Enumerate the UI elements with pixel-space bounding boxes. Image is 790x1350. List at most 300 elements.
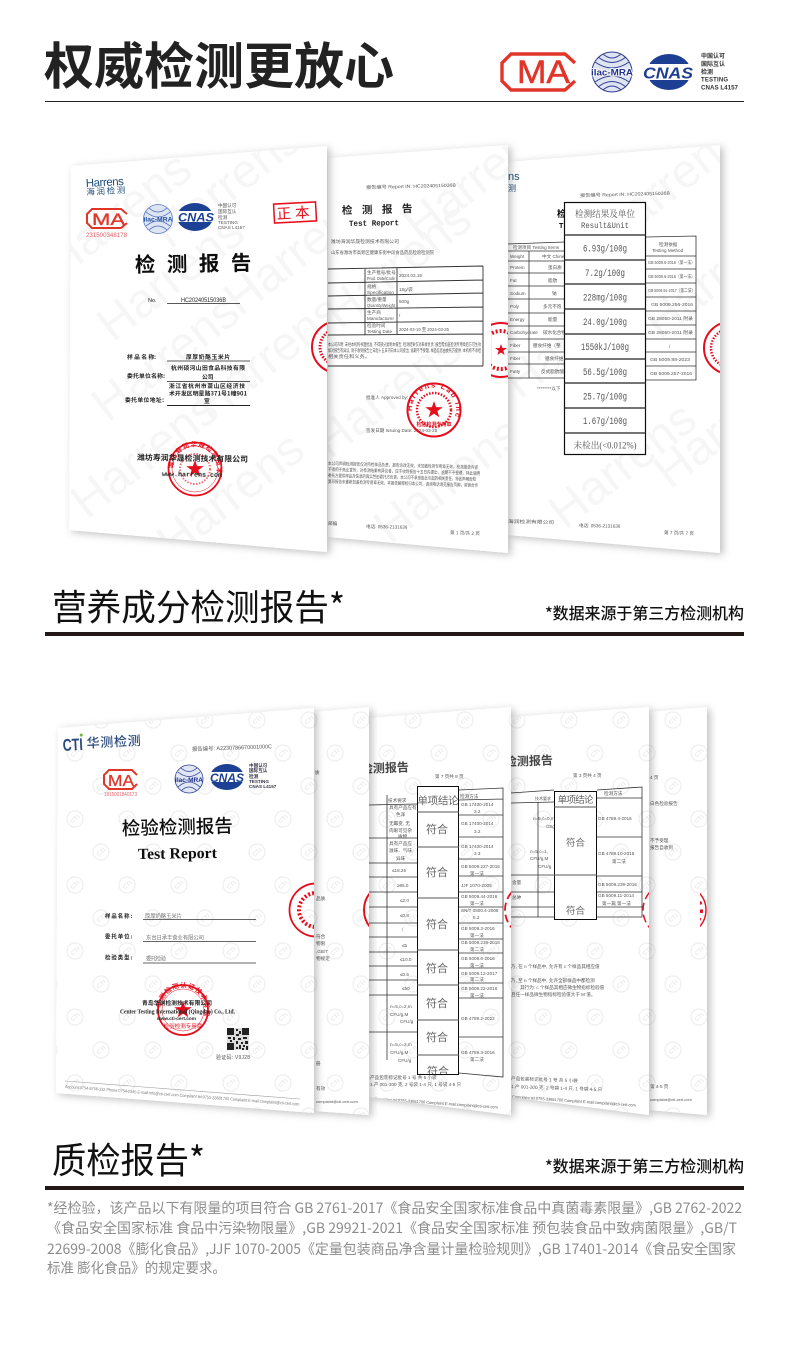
icon: CMA [86,209,128,239]
panel: inspection page 2 [314,706,376,1120]
info table: 2024.03.19 [399,273,422,278]
disclaimer paragraph: *经检验，该产品以下有限量的项目符合 GB 2761-2017《食品安全国家标准食品中真菌毒素限量》,GB 2762-2022 [47,1198,742,1218]
red stamp: 潍坊寿润华晟检测技术有限公司 [168,441,222,474]
panel: inspection page 5: 第 4-5 页 [650,1083,669,1090]
issuer: www.harrens.com [162,471,222,480]
panel: inspection page 3: 检测报告 [361,758,409,777]
panel: report page 2: Harrens [304,322,471,469]
panel: inspection page 4: 第一篇 第一法 [602,900,631,907]
panel: report page 3: GB 28050-2011 附录 [648,315,693,322]
panel: inspection page 3: GB 17400-2014 [461,821,494,826]
panel: inspection page 3: 第一法 [470,962,484,969]
conclusion highlight table: 符合 [426,916,448,932]
panel: report page 3: Poly [510,304,520,309]
panel: inspection page 3: GB 5009.12-2017 [461,971,498,976]
disclaimer paragraph: 22699-2008《膨化食品》,JJF 1070-2005《定量包装商品净含量计量检验规则》,GB 17401-2014《食品安全国家 [47,1239,736,1259]
panel: inspection page 4: 乃, 在 n 个样品中, 允许有 c 个样品其相应值 [511,963,600,970]
panel: inspection page 3: 第一法 [470,992,484,999]
panel: report page 3: ns [508,171,520,183]
results highlight table: 228mg/100g [583,292,627,304]
panel: inspection page 3: 具有产品应有 [389,804,417,811]
panel: report page 2: 潍坊海润华晟检测技术有限公司 [331,238,399,245]
icon: CMA: MA [92,210,126,229]
panel: inspection page 3: 肉眼可见杂 [389,827,412,834]
info table: 生产批号/批号 [367,269,396,276]
panel: inspection page 3: ≤50 [402,986,410,991]
info table: Manufacturer [367,316,394,321]
sample fields: 东台日承丰食业有限公司 [146,934,204,942]
partial stamp [311,322,327,372]
panel: report page 3: Sodium [510,291,526,296]
icon: ilac-MRA mark: ilac-MRA [591,68,633,78]
panel: inspection page 3: 1.产 001-300 克, 2 号袋 1-4 只, 1 号袋 4-5 只 [370,1081,462,1088]
report number: HC20240515036B [181,298,226,304]
panel: inspection page 4: n=5,c=1, [530,849,548,854]
accreditation text: TESTING [701,78,728,84]
panel: inspection page 3: CFU/g [398,1058,412,1063]
panel: inspection page 3: ≥95.0 [397,883,409,888]
sample fields: 委托单位: [105,932,133,940]
conclusion highlight table: 符合 [566,835,585,849]
panel: report page 1 cover: Harrens [214,179,381,326]
red stamp [406,382,462,438]
panel: inspection page 5: 4 页 [650,775,659,781]
panel: inspection page 3: GB 5009.227-2016 [461,864,500,869]
panel: inspection page 2: ,GB/T [316,949,328,954]
panel: report page 3: ********以下 [537,386,561,392]
conclusion highlight table [554,792,597,920]
panel: inspection page 4: 总砷 [512,894,522,901]
info table: 规格 [367,283,377,290]
panel: report page 3: 钠 [552,290,557,297]
cover heading: 检测报告 [135,246,263,278]
results highlight table: 检测结果及单位 [575,208,635,219]
panel: report page 1 cover: Harrens [184,285,351,432]
issuer [120,1000,235,1020]
panel: inspection page 3: 产品包装标记批号 1 号 共 5 小袋 [370,1074,437,1081]
panel: inspection page 3: / [402,927,404,932]
panel: report page 3: 报告编号 Report IN: HC20240515036B [580,190,670,199]
panel: inspection page 3: GB 5009.6-2016 [461,956,495,961]
results highlight table: 1550kJ/100g [581,342,629,354]
report heading: 检测报告 [342,201,422,218]
panel: report page 1 cover: Harrens [87,205,254,352]
panel: inspection page 1 cover: TESTING [249,779,269,784]
panel: inspection page 4: CFU/g [538,864,552,869]
icon: CNAS: CNAS [210,773,244,785]
panel: inspection page 3: 滋味、气味, [389,847,413,854]
panel: report page 3: 测 [508,183,516,194]
panel: report page 1 cover: 中国认可 [218,202,237,209]
heading: quality report: 质检报告* [52,1132,205,1184]
terms paragraph [328,460,480,489]
partial stamp [491,321,508,379]
panel: inspection page 4: 乃, 至 n 个样品中, 允许全部样品中都检测 [511,977,595,984]
panel: report page 3: GB 5009.257-2016 [650,371,692,376]
panel: inspection page 3: 3.2 [474,829,481,834]
sample fields: 术开发区明星路371号1幢901 [169,388,248,398]
conclusion highlight table: 符合 [426,995,448,1011]
info table: Quantity/Weight [367,303,396,308]
panel: report page 3: GB 5009.88-2023 [650,357,690,362]
accreditation text [701,51,739,92]
sample fields: 室 [204,396,210,405]
panel: report page 3: 多元不饱 [543,303,562,310]
icon: CNAS: CNAS [178,210,214,224]
panel: inspection page 3: GB 5009.44-2016 [461,894,498,899]
panel: inspection page 2: 物限 [316,940,326,947]
info table: 如对报告有异议, 请于收到报告之日起十五日内向本公司提出, 逾期不予受理, 样品信息由委托方提供, 本机构不承担 [328,347,481,354]
panel: report page 3: 能量 [548,316,558,323]
report heading [342,203,412,228]
panel: inspection page 1 cover [54,706,322,1118]
panel: inspection page 3: 5.2 [473,915,480,920]
panel: inspection page 4: Complaint tel:0755-33681700 Complaint E-mail:complaint@cti-cert.com [512,1094,637,1108]
sample fields: 委托检验 [146,954,167,962]
panel: report page 1 cover: Harrens [147,422,314,569]
results table background [508,236,696,380]
sample fields: 检验类型: [105,954,133,962]
conclusion highlight table: 符合 [426,960,448,976]
table [511,787,642,917]
icon: ilac-MRA mark [591,52,633,92]
icon: CNAS [177,203,215,231]
conclusion highlight table: 单项结论 [558,792,594,806]
panel: inspection page 4: 含量 [512,879,522,886]
panel: inspection page 3: ≤2.0 [400,898,409,903]
panel: inspection page 3: 3.2 [474,809,481,814]
panel: inspection page 5: complaint@cti-cert.com [650,1097,693,1102]
red stamp: 检验检测专用章 [164,1022,203,1030]
panel: report page 2: Harrens [314,192,481,339]
panel: report page 3: 膳食纤维（整 [533,342,561,349]
panel: report page 3: GB 5009.256-2016 [651,302,693,307]
panel: inspection page 3: 第二法 [470,946,484,953]
panel: report page 2: 报告编号 Report IN: HC20240515036B [366,182,456,191]
accreditation text: 检测 [701,67,713,76]
panel: inspection page 3: 3.3 [474,851,481,856]
sample fields: 厚厚奶酪玉米片 [186,352,230,361]
report heading: Test Report [349,219,399,229]
panel: inspection page 2: 符合 [316,933,326,940]
info table [328,266,483,366]
QR code [227,1028,249,1050]
panel: inspection page 3: 第一法 [470,932,484,939]
panel: inspection page 3: GB 17400-2014 [461,844,494,849]
results highlight table: Result&Unit [581,222,629,231]
accreditation text: 中国认可 [701,51,725,60]
cover heading [122,816,232,862]
results highlight table: 56.5g/100g [583,367,627,379]
info table: Testing Date [367,329,392,334]
heading: nutrition report: 营养成分检测报告* [52,579,345,631]
panel: report page 3: 膳食纤维 [545,355,564,362]
sample fields: 杭州硕河山田食品科技有限 [171,363,245,372]
panel: report page 3: Protein [510,265,525,270]
info table: 18g/袋 [399,286,413,293]
panel: report page 3: 碳水化合物 [543,329,566,336]
cover heading: Test Report [138,845,218,863]
panel: inspection page 4 [511,706,656,1120]
info table: 相关责任和义务。 [328,353,370,360]
panel: report page 3: 脂肪 [548,277,558,284]
panel: inspection page 3: GB 4789.2-2022 [461,1016,495,1021]
info table: 检验时间 [367,322,386,329]
disclaimer paragraph: 标准 膨化食品》的规定要求。 [47,1258,226,1278]
panel: report page 2: 电话: 0536-2131636 [366,523,408,531]
panel: inspection page 2: 物规定 [316,955,330,962]
panel: report page 1 cover: Harrens [82,285,249,432]
panel: inspection page 4: 第二法 [612,858,626,865]
panel: report page 3: 检 [557,207,566,220]
panel: inspection page 3: ≤18.25 [392,868,406,873]
icon: ilac [144,204,173,234]
certification logos [502,51,739,92]
heading: nutrition report [52,579,744,631]
info table: / [399,313,401,318]
conclusion highlight table: 符合 [566,903,585,917]
Harrens logo: 海润检测 [86,184,126,198]
panel: inspection page 5: 白色检验报告 [650,800,678,807]
icon: CMA: 1815001840173 [104,792,137,798]
panel: report page 3: 反式脂肪酸 [541,368,564,375]
panel: inspection page 3: 技术要求 [388,797,407,804]
panel: inspection page 4: GB 5009.239-2016 [598,882,637,887]
panel: inspection page 5: 不予受理, [650,837,670,844]
panel: inspection page 3: 色泽 [396,811,406,818]
panel: inspection page 4: CFU/g,M [530,856,549,861]
panel: inspection page 5: 报告自收到 [650,844,673,851]
info table: 本公司声明: 未经本机构书面批准, 不得部分复制本报告, 检测结果仅对来样负责, 报告需加盖检测专用章后方可生效 [328,341,481,348]
info table: 数量/重量 [367,296,387,303]
panel: report page 3: 海润检测有限公司 [508,518,555,526]
panel: report page 3: 蛋白质 [548,264,562,271]
title: 权威检测更放心 [44,27,394,99]
sample fields: 样品名称: [105,912,133,920]
panel: inspection page 2: 质 [315,769,320,776]
panel: inspection page 3: 第二法 [470,976,484,983]
panel: report page 3: Fat [510,278,517,283]
panel: inspection page 3: 第一法 [470,900,484,907]
panel: report page 3: 检测依据 [659,241,678,248]
panel: inspection page 3: 质物 [398,833,408,840]
info table: 500g [399,299,410,304]
panel: report page 2: Harrens [364,407,531,554]
panel: report page 3: GB 5009.5-2016（第一法） [648,259,695,266]
panel: report page 3: GB 28050-2011 附录 [648,329,693,336]
panel: inspection page 1 cover: 中国认可 [249,762,268,769]
panel: report page 1 cover [68,144,334,558]
panel: inspection page 3: ≤5 [402,943,408,948]
panel: inspection page 4: GB 4789.10-2016 [598,851,635,856]
panel: report page 2: 山东省潍坊市高新区健康东街中段食品药品检验检测院 [331,249,434,256]
Harrens logo [86,178,125,196]
panel: report page 1 cover: 检测 [218,214,228,221]
panel: inspection page 3: JJF 1070-2005 [461,883,492,888]
issuer: 青岛华测检测技术有限公司 [142,998,212,1007]
panel: inspection page 3: 第一法 [470,870,484,877]
Harrens logo: Harrens [86,176,124,190]
panel: inspection page 3: 第 7 页共 8 页 [435,773,464,780]
panel: report page 1 cover: 国际互认 [218,208,237,215]
panel: report page 3: Weight [510,254,525,259]
accreditation text: CNAS L4157 [701,86,739,92]
panel: inspection page 3: Complaint tel:0755-33681700 Complaint E-mail:complaint@cti-cert.com [374,1096,499,1110]
red stamp [156,982,210,1036]
panel: report page 1 cover: Harrens [61,382,228,529]
panel: inspection page 3: GB 5009.239-2016 [461,940,500,945]
panel: report page 3: Testing Method [652,248,684,253]
panel: inspection page 3: ≤10.0 [400,957,412,962]
conclusion highlight table: 单项结论 [418,793,459,808]
results highlight table [564,202,646,454]
panel: inspection page 3: n=5,c=2,m [390,1004,412,1009]
panel: report page 2: 签发日期 Issuing Date: 2024-03-25 [366,427,438,434]
panel: inspection page 4: GB 4789.4-2016 [598,816,632,821]
panel: inspection page 1 cover: 报告编号: A2230786670001000C [192,742,272,753]
panel: inspection page 3: 具有产品应 [389,840,412,847]
panel: inspection page 2: 有效 [316,1085,326,1092]
panel: report page 3: Carbohydrate [510,330,538,335]
panel: report page 1 cover: CNAS L4157 [218,225,245,230]
panel: report page 3: Harrens [584,112,751,259]
report number: No. [148,298,157,304]
results highlight table: 未检出(<0.012%) [574,440,636,450]
panel: inspection page 4: 产品包装标记批号 1 号 共 5 小袋 [511,1075,578,1084]
panel: inspection page 4: 1.产 001-300 克, 2 号袋 1-4 只, 1 号袋 4-5 只 [511,1083,603,1093]
sample fields: 公司 [202,372,214,381]
conclusion highlight table [417,786,459,1079]
panel: report page 1 cover: Harrens [144,112,311,259]
panel: inspection page 1 cover: 验证码: V9J28 [216,1054,250,1061]
panel: inspection page 2: complaint@cti-cert.com [316,1099,359,1104]
sample fields [125,352,250,406]
info table: 生产商 [367,309,381,316]
red stamp: 检验检测专用章 [416,421,452,428]
panel: inspection page 3: GB 5009.3-2016 [461,926,495,931]
panel: report page 2 [327,144,516,558]
sample fields: 委托单位地址: [125,395,164,404]
panel: inspection page 3: ≤0.8 [400,913,409,918]
icon: CMA: 231500348178 [86,233,128,239]
results highlight table: 6.93g/100g [583,244,627,256]
panel: inspection page 1 cover: 国际互认 [249,767,268,774]
icon: CNAS mark [642,54,696,90]
report number [148,298,240,304]
panel: inspection page 3: CFU/g,M [390,1012,409,1017]
panel: report page 2: 第 1 页/共 2 页 [450,529,480,537]
sample fields: 样 品 名 称: [127,352,156,361]
panel: inspection page 4: 其行为: c 个样品其相应微生物指标检验值 [520,984,605,991]
CTI logo: CTI [62,735,83,755]
panel: inspection page 3: CFU/g [400,1019,414,1024]
panel: inspection page 1 cover: CNAS L4157 [249,784,277,789]
footer: Account:0754-8756-132 Phone:0754-2345 E-mail:info@cti-cert.com Complaint tel:0755-33681700 Complaint E-mail:complaint@cti-cert.com [65,1084,300,1107]
panel: inspection page 2: 册 [316,1061,321,1067]
results highlight table: 24.0g/100g [583,317,627,329]
partial stamp [290,884,342,936]
panel: inspection page 4: 技术要求 [535,795,551,801]
heading: quality report [52,1132,744,1184]
panel: inspection page 3: 无霉变, 无 [389,820,410,827]
panel: inspection page 3: GB 5009.22-2016 [461,986,498,991]
red stamp [168,441,222,496]
icon: CNAS mark: CNAS [643,66,693,82]
icon: CMA mark [502,54,575,90]
panel: report page 3: / [669,344,671,349]
panel: report page 3: Fiber [510,343,521,348]
icon: CNAS [209,764,245,790]
panel: inspection page 4: 检测报告 [505,751,553,770]
panel: inspection page 2: 品质 [316,895,326,902]
icon: CMA mark: MA [517,54,571,90]
icon: ilac: ilac-MRA [175,777,203,784]
panel: inspection page 3 [369,706,518,1120]
panel: report page 1 cover: Harrens [34,142,201,289]
terms paragraph: 本公司声明检测报告仅对所检样品负责，报告涂改无效，未加盖检测专用章无效，检测报告内容 [328,460,478,471]
panel: report page 3: GB 5009.91-2017（第二法） [648,287,695,294]
issuer: 潍坊寿润华晟检测技术有限公司 [137,452,248,465]
info table: 2024-03-19 至 2024-03-25 [399,327,449,332]
disclaimer paragraph [47,1198,742,1278]
cover heading: 检验检测报告 [121,812,233,841]
terms paragraph: 委托方提供样品及信息的真实性由委托方负责，本公司不承担由此引起的相关责任，特此声明告知 [328,472,476,483]
panel: report page 3: Harrens [539,392,706,539]
conclusion highlight table: 符合 [426,864,448,880]
accreditation text: 国际互认 [701,59,725,68]
panel: inspection page 4: 第 3 页共 4 页 [573,772,602,779]
panel: report page 3: Fatty [510,369,521,374]
sample fields: 委托单位名称: [127,371,165,380]
panel: inspection page 4: 且任一样品微生物指标检验值大于 M 值。 [511,991,595,998]
panel: report page 3: 中文 Chines [542,253,567,260]
panel: report page 3: Harrens [494,262,661,409]
info table: Specification [367,290,394,295]
panel: report page 3: Energy [510,317,525,322]
conclusion highlight table: 符合 [427,1063,449,1079]
results highlight table: 25.7g/100g [583,392,627,404]
panel: report page 2: 批准人 Approved by: [366,394,408,401]
disclaimer paragraph: 《食品安全国家标准 食品中污染物限量》,GB 29921-2021《食品安全国家标准 预包装食品中致病菌限量》,GB/T [47,1218,737,1238]
panel: inspection page 3: SN/T 0800.4-2008 [461,908,499,913]
panel: inspection page 3: GB 17400-2014 [461,802,494,807]
CTI logo [63,734,140,751]
sample fields: 厚厚奶酪玉米片 [145,912,182,920]
terms paragraph: 不得用于商业宣传，对检测结果有异议者，应于收到报告十五日内提出，逾期不予受理，特此说明 [328,466,480,477]
panel: inspection page 4: 检测方法 [604,790,623,797]
panel: report page 3: 第 7 页/共 7 页 [664,529,694,537]
panel: inspection page 3: CFU/g,M [390,1050,409,1055]
terms paragraph: 复印报告未重新加盖检测专用章无效，本报告解释权归本公司，咨询电话请见报告页脚，谢谢合作 [328,478,478,489]
panel: inspection page 3: n=5,c=2,m [390,1042,412,1047]
issuer: www.cti-cert.com [156,1016,196,1021]
icon: CMA: MA [108,773,134,790]
panel: inspection page 1 cover: 检测 [249,773,259,780]
results highlight table: 7.2g/100g [585,268,625,280]
note: data source: *数据来源于第三方检测机构 [545,600,744,624]
issuer: Center Testing International (Qingdao) Co., Ltd. [120,1008,235,1016]
red stamp: 华测检测认证技术有限公司 [156,982,210,1016]
panel: inspection page 3: 异味 [396,855,406,862]
conclusion highlight table: 符合 [426,821,448,837]
panel: inspection page 3: 检测方法 [460,793,479,800]
original stamp: 正本 [276,201,314,224]
panel: inspection page 4: /25g [546,824,555,829]
icon: ilac: ilac-MRA [144,216,173,224]
table [369,788,503,1077]
red stamp: Harrens Lab Inc [406,384,460,417]
sample fields: 浙江省杭州市萧山区经济技 [169,381,245,390]
